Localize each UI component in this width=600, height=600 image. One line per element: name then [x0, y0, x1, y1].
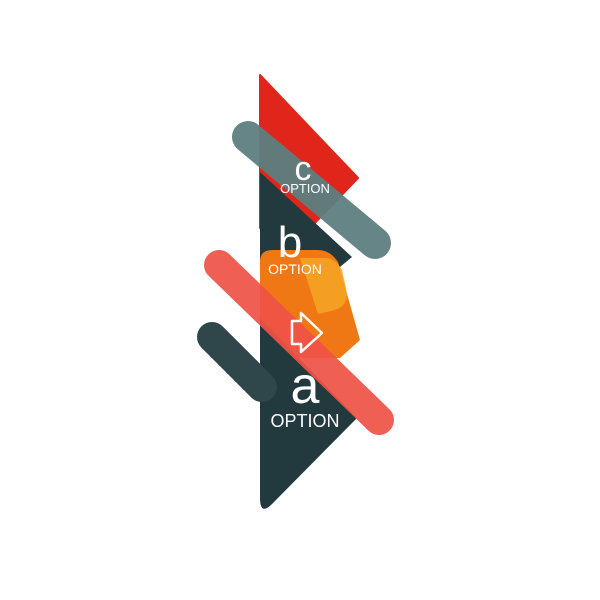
triangle: dark slate middle	[260, 172, 352, 300]
triangle: dark bottom	[260, 318, 357, 509]
bar: grey-teal	[248, 137, 375, 243]
label: option a	[270, 357, 340, 431]
triangle: red top	[260, 75, 358, 228]
shape: light orange	[300, 258, 347, 314]
label: option c: OPTION	[280, 181, 330, 196]
label: option b: OPTION	[268, 261, 322, 277]
shape: orange	[260, 250, 360, 358]
bar: coral	[219, 265, 379, 420]
label: option b	[268, 218, 322, 277]
label: option c: c	[294, 150, 312, 188]
label: option a: a	[291, 357, 320, 415]
icon: arrow outline	[292, 313, 322, 352]
bar: dark slate	[212, 337, 262, 387]
label: option a: OPTION	[270, 411, 340, 431]
label: option c	[280, 150, 330, 196]
label: option b: b	[278, 218, 302, 267]
